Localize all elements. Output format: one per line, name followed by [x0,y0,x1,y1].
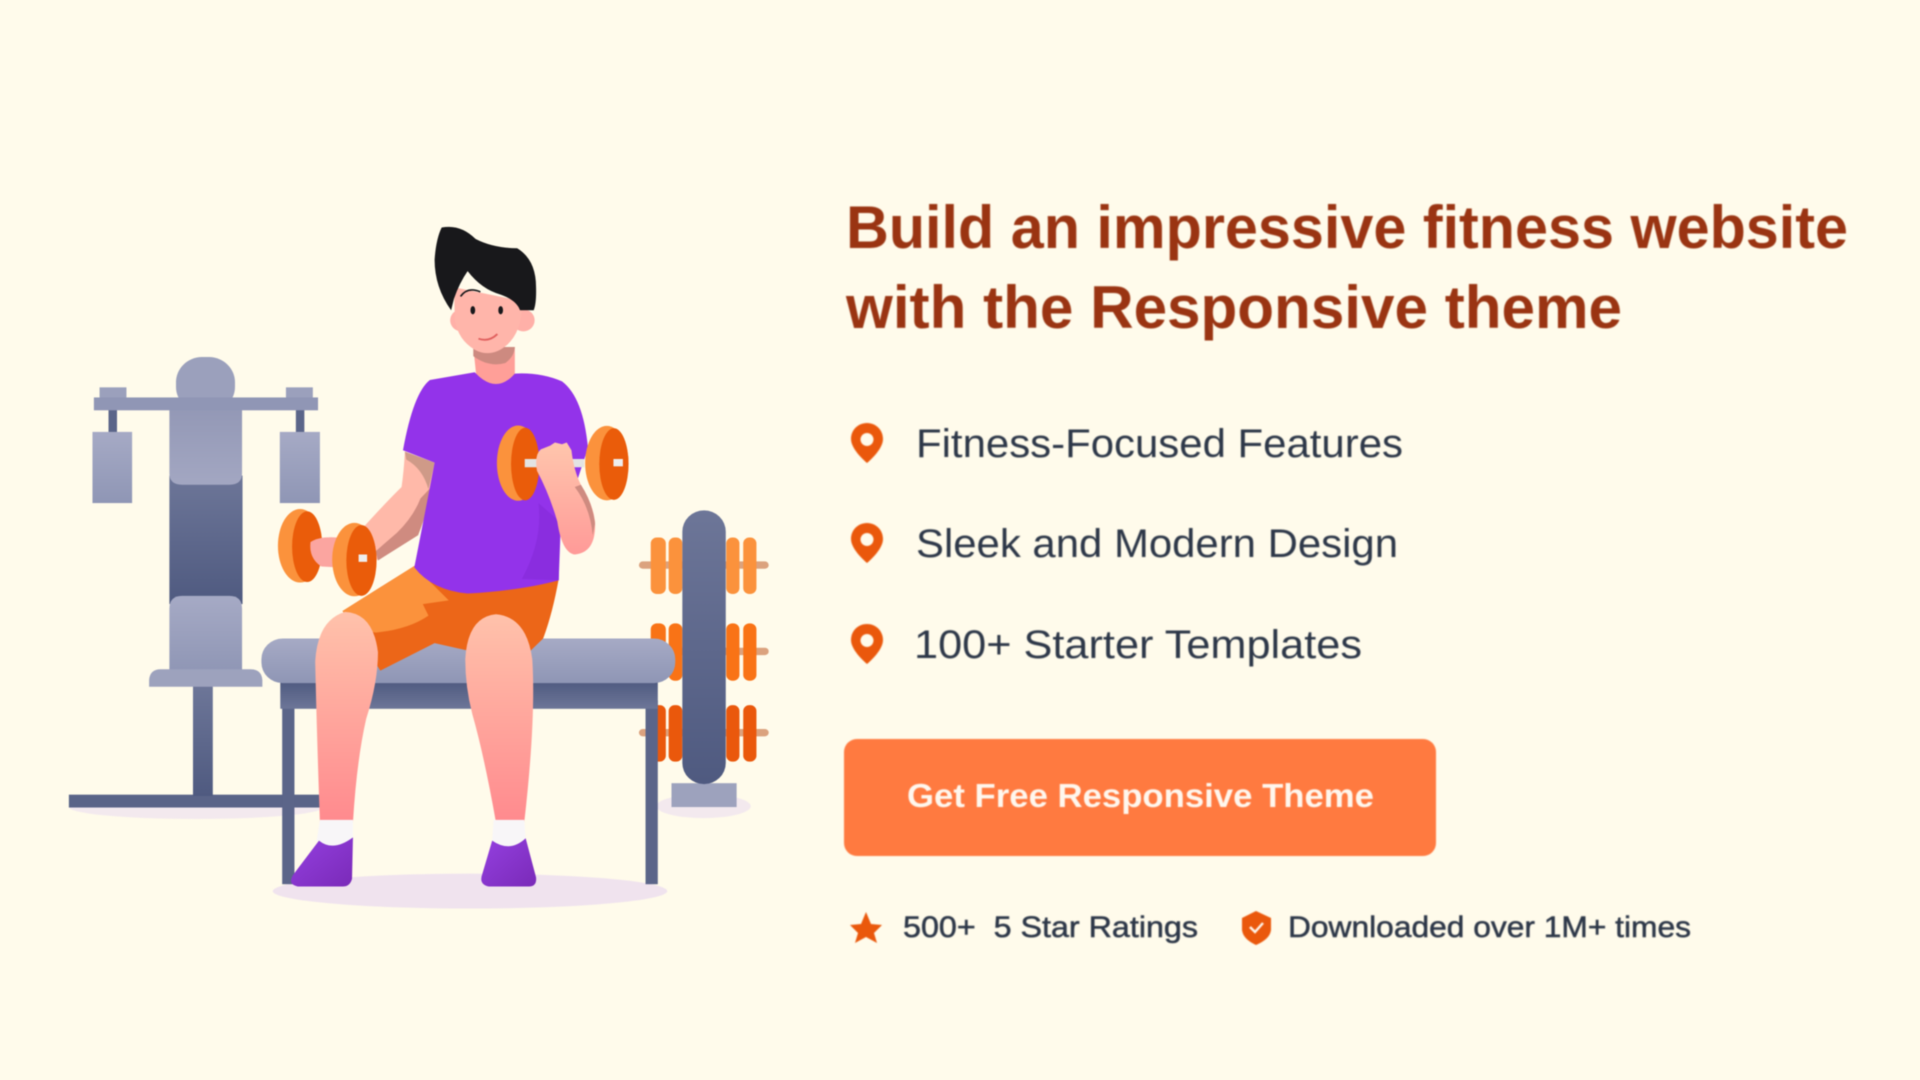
socks [317,820,526,847]
call to action button: Get Free Responsive Theme [907,777,1374,814]
downloads text: Downloaded over 1M+ times [1288,911,1691,944]
t-shirt [403,372,588,594]
icon: star [850,912,882,943]
shoes [291,837,536,887]
hair [435,227,536,310]
feature list [851,422,1403,667]
legs [315,612,533,822]
gym machine [69,357,324,819]
feature: fitness-focused features: Fitness-Focused Features [916,422,1403,466]
bench [261,639,675,909]
shorts [343,565,559,671]
illustration: man lifting dumbbells on a bench [69,227,769,909]
feature: sleek and modern design: Sleek and Modern Design [916,522,1398,566]
heading: with the Responsive theme [845,274,1622,341]
icon: location pin [851,624,883,664]
downloads row [1242,911,1691,945]
left arm [362,452,435,560]
heading [845,194,1848,341]
weight rack [639,510,769,818]
left dumbbell [278,509,377,596]
head [435,227,536,353]
icon: location pin [851,523,883,563]
person [278,227,629,887]
feature: 100+ starter templates: 100+ Starter Templates [914,623,1362,667]
ratings text: 500+ 5 Star Ratings [903,911,1198,944]
icon: location pin [851,423,883,463]
icon: shield with check [1242,911,1271,945]
right dumbbell and forearm [497,425,629,555]
heading: Build an impressive fitness website [846,194,1848,261]
ratings row [850,911,1198,944]
neck [473,346,515,387]
call to action button [844,739,1436,856]
